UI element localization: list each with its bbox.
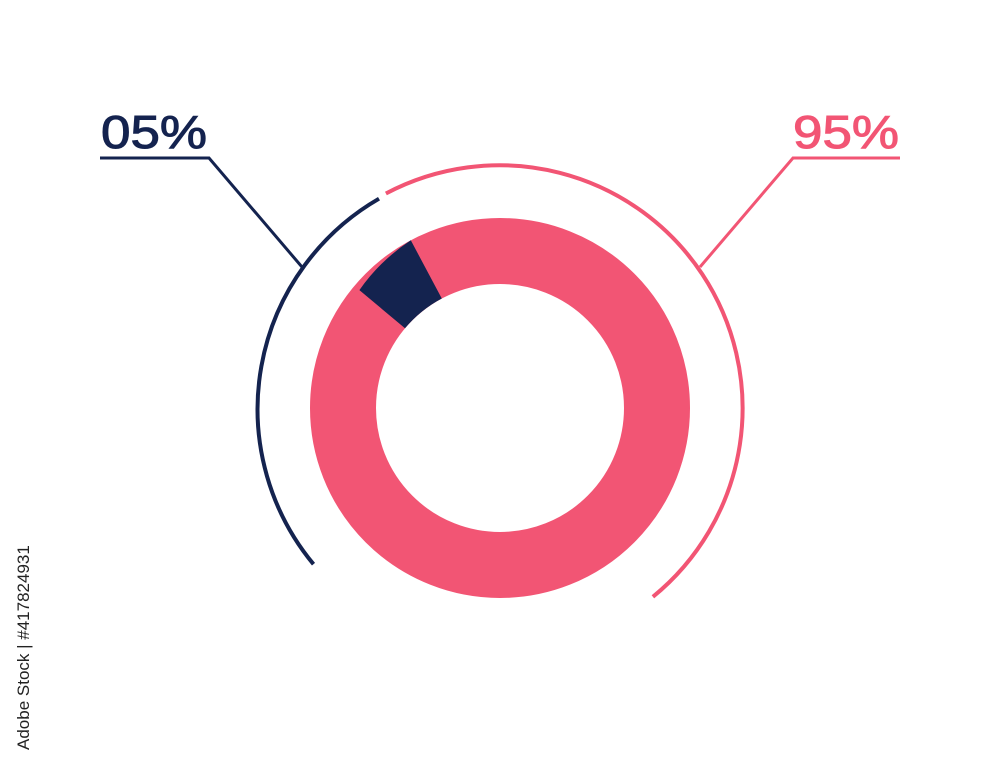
donut: navy 5% segment [359,240,442,328]
leader line: navy [100,158,302,267]
outer arc: navy 5% [258,199,379,564]
watermark id: Adobe Stock | #417824931 [14,545,33,750]
label: 95%: 95% [793,106,899,158]
donut chart [343,240,657,565]
label: 05%: 05% [101,106,207,158]
donut: pink 95% ring [343,251,657,565]
leader line: pink [700,158,900,267]
outer arc: pink 95% [386,165,743,597]
